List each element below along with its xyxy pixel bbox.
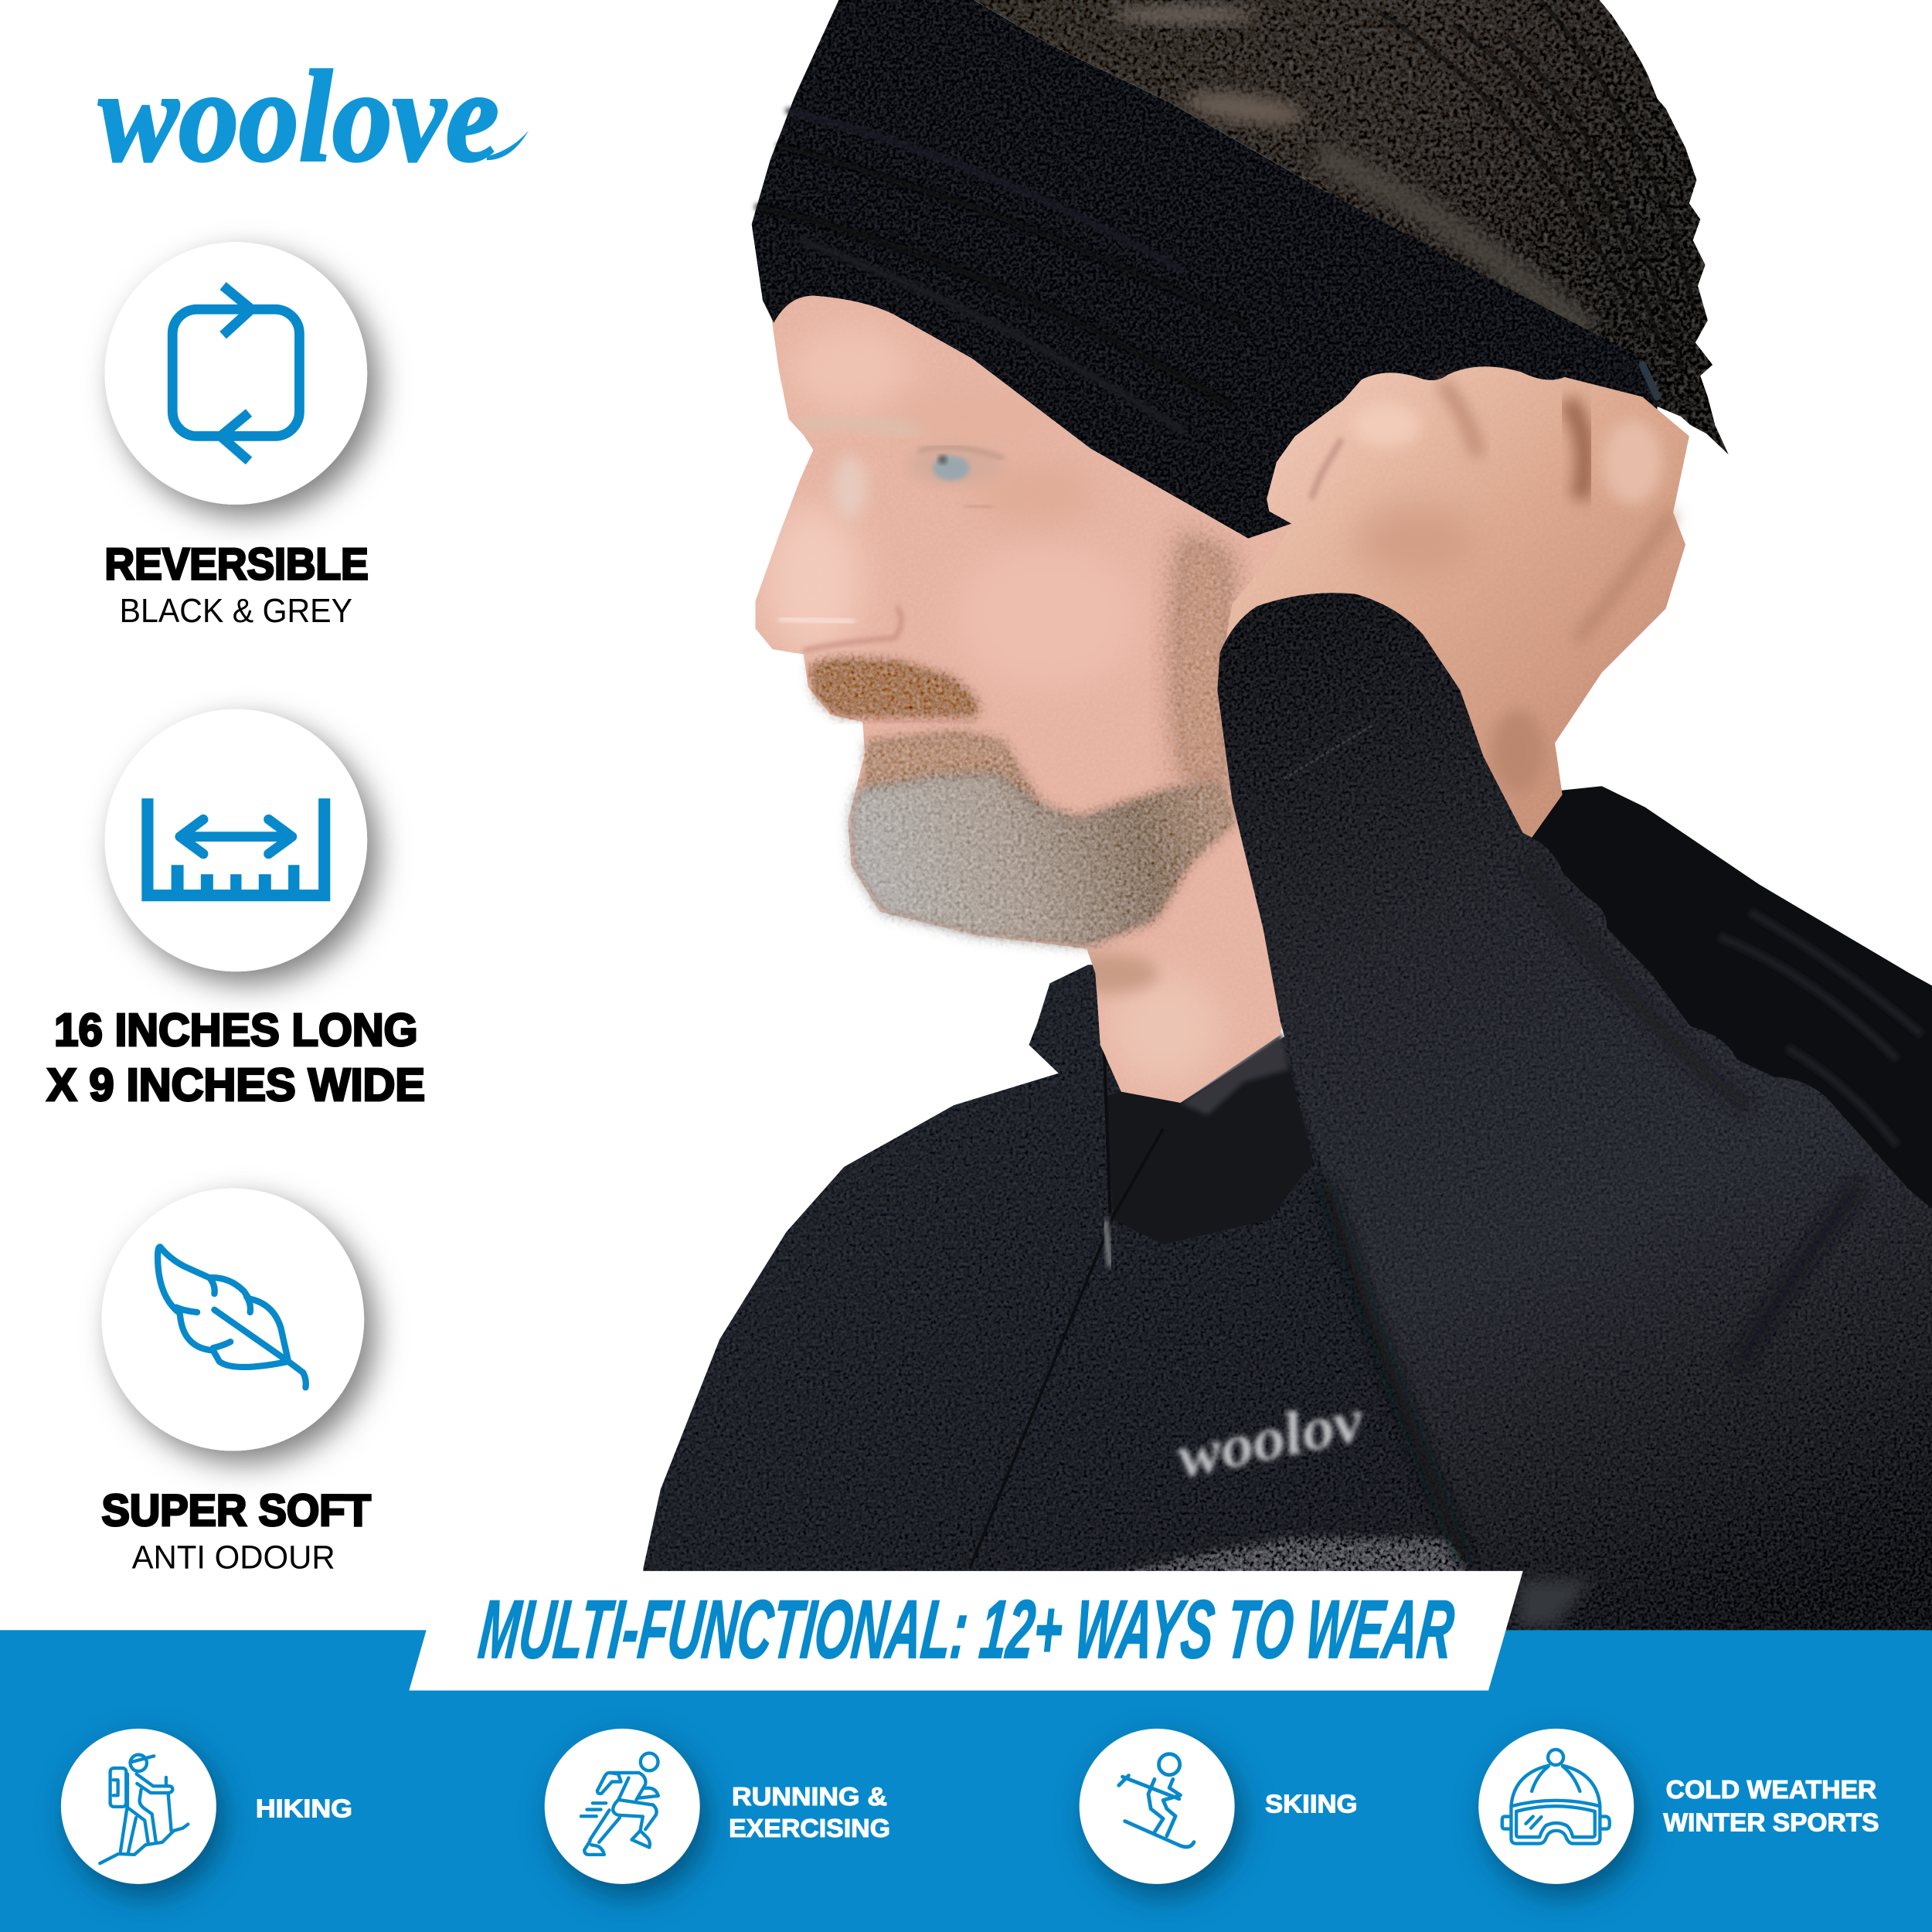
subheading: ANTI ODOUR <box>132 1539 335 1577</box>
chin stubble <box>862 730 1047 838</box>
label <box>729 1783 890 1843</box>
feature: soft <box>102 1189 371 1577</box>
label: COLD WEATHER <box>1666 1776 1876 1804</box>
circle badge <box>105 242 367 505</box>
bottom blue band <box>0 1630 1932 1932</box>
icon: runner <box>581 1753 658 1855</box>
eye <box>906 446 1004 508</box>
neck and face skin <box>755 295 1318 1103</box>
hand shading <box>1311 382 1673 794</box>
photo: man wearing black headband <box>643 0 1932 1639</box>
icon: feather <box>158 1247 306 1387</box>
beard <box>848 770 1238 949</box>
hair <box>964 0 1729 454</box>
circle badge <box>102 1189 364 1451</box>
icon: hiker <box>100 1755 188 1863</box>
headband folds <box>758 111 1657 431</box>
activity: skiing <box>1080 1729 1358 1884</box>
circle badge <box>1478 1729 1634 1884</box>
icon: hat and goggles <box>1502 1750 1610 1844</box>
feature: reversible <box>105 242 369 630</box>
circle badge <box>61 1729 216 1884</box>
shirt inner tee and collar <box>970 1032 1314 1569</box>
icon: ruler <box>141 798 330 901</box>
lips <box>870 721 962 734</box>
icon: reversible arrows <box>172 286 299 461</box>
subheading: BLACK & GREY <box>120 592 352 630</box>
face shading <box>764 327 1219 1084</box>
sideburn stubble <box>1165 524 1238 788</box>
shirt gray print <box>1071 1536 1475 1583</box>
banner <box>409 1571 1523 1691</box>
icon: skier <box>1119 1754 1194 1847</box>
moustache <box>808 657 980 719</box>
circle badge <box>105 709 367 971</box>
activity: hiking <box>61 1729 352 1884</box>
label: EXERCISING <box>729 1815 890 1843</box>
shoulder ribs <box>1719 912 1922 1146</box>
sleeve arm <box>1217 593 1932 1639</box>
heading: SUPER SOFT <box>102 1486 371 1536</box>
label: WINTER SPORTS <box>1663 1808 1879 1837</box>
logo: woolove: woolove <box>99 43 499 189</box>
heading: 16 INCHES LONG <box>54 1005 417 1056</box>
label <box>1663 1776 1879 1837</box>
activity: cold weather <box>1478 1729 1879 1884</box>
circle badge <box>1080 1729 1235 1884</box>
label: SKIING <box>1265 1790 1358 1818</box>
shirt back shoulder <box>1484 757 1932 1232</box>
sleeve details <box>1284 725 1861 1627</box>
hand <box>1221 366 1689 850</box>
label: RUNNING & <box>732 1783 887 1811</box>
hair highlights <box>1109 0 1694 369</box>
label: HIKING <box>256 1795 352 1824</box>
shirt body <box>643 788 1932 1639</box>
heading: X 9 INCHES WIDE <box>47 1060 425 1111</box>
heading: REVERSIBLE <box>105 539 369 589</box>
shirt logo: woolov <box>1172 1386 1370 1492</box>
headband <box>752 0 1657 539</box>
heading <box>47 1005 425 1111</box>
feature: size <box>47 709 425 1111</box>
circle badge <box>545 1729 700 1884</box>
activity: running <box>545 1729 890 1884</box>
